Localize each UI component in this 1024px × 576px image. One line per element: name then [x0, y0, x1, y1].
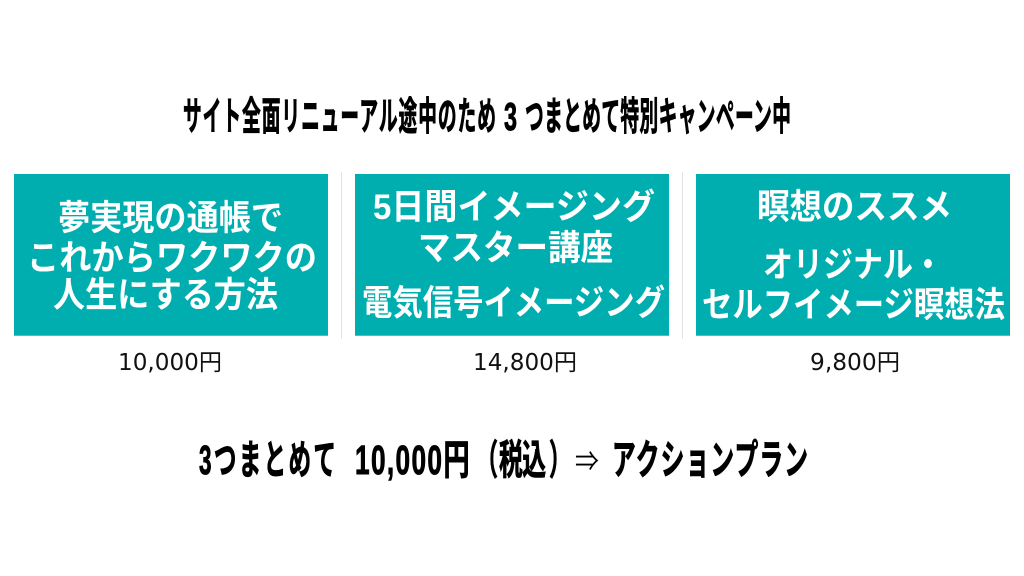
panel: course 3: オリジナル・	[763, 246, 943, 285]
bundle offer line: （	[476, 437, 498, 483]
title	[183, 95, 791, 139]
price: course 1: 10,000円	[118, 350, 222, 376]
bundle offer line: 10,000円	[355, 438, 470, 484]
panel: course 1	[14, 174, 328, 336]
panel: course 2: 電気信号イメージング	[362, 284, 665, 323]
panel: course 1: これからワクワクの	[27, 239, 317, 278]
panel: course 3: 瞑想のススメ	[757, 188, 952, 227]
bundle offer line	[199, 437, 808, 484]
title: つまとめて特別キャンペーン中	[525, 96, 791, 139]
panel: course 1: 人生にする方法	[53, 276, 278, 315]
panel: course 1: 夢実現の通帳で	[58, 199, 283, 238]
bundle offer line: 3つまとめて	[199, 438, 336, 484]
bundle offer line: ）	[549, 437, 571, 483]
bundle offer line: 税込	[499, 439, 546, 484]
title: サイト全面リニューアル途中のため	[183, 96, 496, 139]
title: 3	[504, 95, 517, 138]
panel: course 2	[355, 174, 669, 336]
panel: course 2: 5日間イメージング	[373, 188, 655, 227]
price: course 3: 9,800円	[810, 350, 900, 376]
bundle offer line: ⇒	[575, 446, 599, 477]
panel: course 3	[696, 174, 1010, 336]
panel: course 2: マスター講座	[418, 229, 613, 268]
price: course 2: 14,800円	[473, 350, 577, 376]
bundle offer line: アクションプラン	[612, 439, 808, 484]
